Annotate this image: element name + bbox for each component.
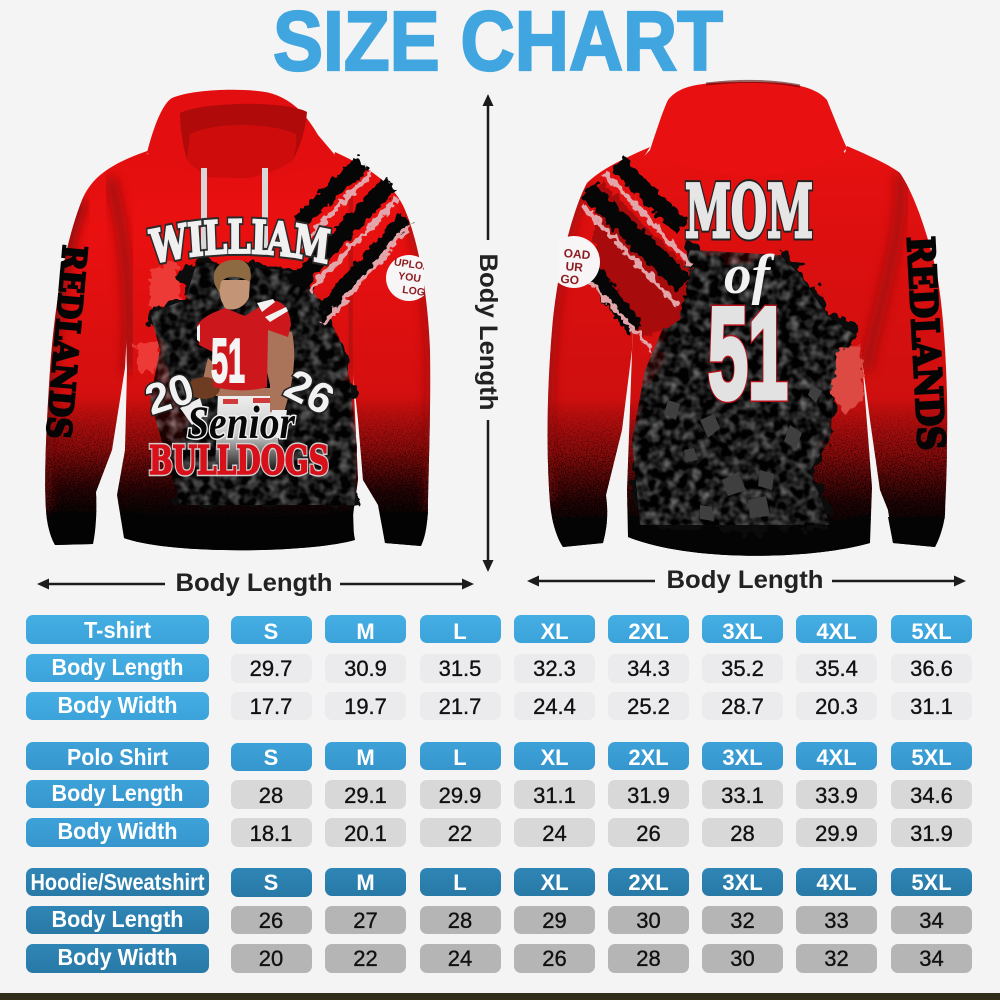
Hoodie header row: S <box>264 870 278 895</box>
table: Hoodie/Sweatshirt <box>26 868 972 973</box>
Hoodie header row: 2XL <box>628 870 669 895</box>
Hoodie body length row: Body Length <box>52 906 184 932</box>
T-shirt header row: 3XL <box>722 619 763 644</box>
Polo body length row: 29.1 <box>344 783 387 808</box>
year 20: 20 <box>140 364 200 425</box>
Polo body width row: 28 <box>730 821 755 846</box>
Hoodie header row: M <box>356 870 375 895</box>
T-shirt header row: T-shirt <box>84 617 151 643</box>
T-shirt body width row: 21.7 <box>439 694 481 719</box>
Polo header row <box>26 742 972 771</box>
Polo body width row: 24 <box>542 821 567 846</box>
Hoodie header row: L <box>453 870 467 895</box>
Polo body length row: Body Length <box>52 780 184 806</box>
Polo body length row <box>26 780 972 809</box>
T-shirt body width row: 24.4 <box>533 694 576 719</box>
back sleeves and body <box>548 146 947 556</box>
fold shading and speckle <box>40 178 435 520</box>
upload logo badge: LOG <box>402 284 426 299</box>
right width arrow: Body Length <box>666 566 824 594</box>
Hoodie body width row: 22 <box>353 946 378 971</box>
back upload logo badge: GO <box>560 272 580 287</box>
Hoodie header row <box>26 868 972 897</box>
T-shirt body length row: 30.9 <box>344 656 387 681</box>
rock shards <box>664 385 822 521</box>
senior script: Senior <box>187 397 296 449</box>
claw marks <box>294 163 409 326</box>
Hoodie header row: 5XL <box>911 870 952 895</box>
T-shirt body length row <box>26 654 972 683</box>
table: T-shirt <box>26 615 972 720</box>
Hoodie body length row <box>26 906 972 934</box>
vertical dimension arrow: Body Length <box>474 254 502 410</box>
back upload logo badge: OAD <box>563 246 591 262</box>
Polo body width row <box>26 818 972 847</box>
Hoodie body length row: 29 <box>542 908 567 933</box>
back number 51: 51 <box>708 280 788 426</box>
Hoodie body width row: 32 <box>824 946 849 971</box>
back title: Mom <box>685 169 813 255</box>
T-shirt body width row: 25.2 <box>627 694 670 719</box>
Hoodie header row: 4XL <box>816 870 857 895</box>
T-shirt body length row: 35.4 <box>815 656 858 681</box>
team: Bulldogs: BULLDOGS <box>149 438 329 484</box>
Polo body width row: 29.9 <box>815 821 858 846</box>
Hoodie body width row: 30 <box>730 946 755 971</box>
Polo body length row: 34.6 <box>910 783 953 808</box>
sleeves and body <box>45 150 430 550</box>
T-shirt header row: M <box>356 619 375 644</box>
red paint patch <box>832 345 864 415</box>
head <box>217 280 250 310</box>
left width arrow: Body Length <box>176 569 332 597</box>
back hem and cuffs <box>556 514 945 556</box>
Polo body width row: 31.9 <box>910 821 953 846</box>
Polo header row: L <box>453 745 467 770</box>
Hoodie body width row: Body Width <box>58 944 178 970</box>
left width arrow <box>37 569 474 597</box>
front hoodie <box>39 90 430 550</box>
table: Polo Shirt <box>26 742 972 847</box>
back fold shading and speckle <box>540 173 955 530</box>
Polo body width row: 22 <box>448 821 472 846</box>
Polo body length row: 31.1 <box>533 783 576 808</box>
T-shirt header row: 2XL <box>628 619 669 644</box>
Hoodie body width row: 34 <box>919 946 944 971</box>
T-shirt header row: L <box>453 619 467 644</box>
Hoodie body length row: 27 <box>353 908 378 933</box>
back sleeve text: Redlands: REDLANDS <box>898 235 954 451</box>
red paint patches <box>135 262 182 372</box>
back claw marks <box>581 163 692 350</box>
back title: Mom: MOM <box>685 169 813 255</box>
T-shirt body width row <box>26 692 972 720</box>
Hoodie header row: XL <box>540 870 569 895</box>
T-shirt header row: 4XL <box>816 619 857 644</box>
back hoodie <box>540 81 955 556</box>
Polo body width row: 18.1 <box>250 821 292 846</box>
T-shirt body length row: 36.6 <box>910 656 953 681</box>
T-shirt body width row: 19.7 <box>344 694 387 719</box>
back title: Mom: MOM <box>685 169 813 255</box>
T-shirt header row: S <box>264 619 278 644</box>
player photo <box>180 260 294 470</box>
name: William: WILLIAM <box>147 218 331 264</box>
of script: of <box>724 244 775 306</box>
Hoodie body width row <box>26 944 972 973</box>
back upload logo badge: UR <box>565 259 584 275</box>
bottom strip <box>0 993 1000 1000</box>
Hoodie body width row: 24 <box>448 946 472 971</box>
Hoodie body length row: 34 <box>919 908 944 933</box>
Hoodie body length row: 33 <box>824 908 849 933</box>
Polo body length row: 29.9 <box>439 783 481 808</box>
back hood <box>650 81 847 176</box>
Polo header row: 5XL <box>911 745 952 770</box>
Hoodie body width row: 28 <box>636 946 661 971</box>
Polo body width row: Body Width <box>58 818 178 844</box>
Hoodie body length row: 26 <box>259 908 283 933</box>
Hoodie header row: Hoodie/Sweatshirt <box>30 869 205 895</box>
T-shirt body width row: 28.7 <box>721 694 764 719</box>
Polo body length row: 28 <box>259 783 283 808</box>
Hoodie body length row: 28 <box>448 908 472 933</box>
back number 51 <box>708 280 788 426</box>
Hoodie body width row: 26 <box>542 946 567 971</box>
T-shirt body length row: 29.7 <box>250 656 292 681</box>
Polo body width row: 26 <box>636 821 661 846</box>
T-shirt header row <box>26 615 972 644</box>
Polo header row: Polo Shirt <box>67 744 168 770</box>
T-shirt header row: XL <box>540 619 569 644</box>
Polo header row: 3XL <box>722 745 763 770</box>
Polo body length row: 33.1 <box>721 783 764 808</box>
back upload logo badge <box>558 236 600 288</box>
T-shirt body length row: 35.2 <box>721 656 764 681</box>
T-shirt body width row: 20.3 <box>815 694 858 719</box>
year 26: 26 <box>277 360 342 425</box>
T-shirt body length row: 34.3 <box>627 656 670 681</box>
Hoodie body length row: 32 <box>730 908 755 933</box>
upload logo badge: UPLOA <box>393 256 432 273</box>
back number 51: 51 <box>708 280 788 426</box>
Polo body length row: 33.9 <box>815 783 858 808</box>
Polo header row: 2XL <box>628 745 669 770</box>
hem and cuffs <box>52 510 428 550</box>
T-shirt body length row: 32.3 <box>533 656 576 681</box>
T-shirt body length row: 31.5 <box>439 656 481 681</box>
Hoodie header row: 3XL <box>722 870 763 895</box>
T-shirt header row: 5XL <box>911 619 952 644</box>
upload logo badge: YOU <box>397 270 422 285</box>
T-shirt body length row: Body Length <box>52 654 184 680</box>
rock hole <box>145 255 360 507</box>
upload logo badge <box>386 255 424 301</box>
T-shirt body width row: 17.7 <box>250 694 292 719</box>
hood <box>147 90 335 178</box>
drawstrings <box>204 168 265 252</box>
player photo: 51 <box>211 327 245 396</box>
sleeve text: Redlands: REDLANDS <box>39 244 94 440</box>
Polo body length row: 31.9 <box>627 783 670 808</box>
name: William: WILLIAM <box>146 216 332 267</box>
Polo header row: 4XL <box>816 745 857 770</box>
Hoodie body width row: 20 <box>259 946 283 971</box>
right width arrow <box>527 566 966 594</box>
Hoodie body length row: 30 <box>636 908 661 933</box>
back rock hole <box>630 243 860 532</box>
team: Bulldogs: BULLDOGS <box>149 438 329 484</box>
Polo header row: XL <box>540 745 569 770</box>
T-shirt body width row: 31.1 <box>910 694 953 719</box>
Polo body width row: 20.1 <box>344 821 387 846</box>
T-shirt body width row: Body Width <box>58 692 178 718</box>
vertical dimension arrow <box>474 94 502 572</box>
Polo header row: M <box>356 745 375 770</box>
Polo header row: S <box>264 745 278 770</box>
